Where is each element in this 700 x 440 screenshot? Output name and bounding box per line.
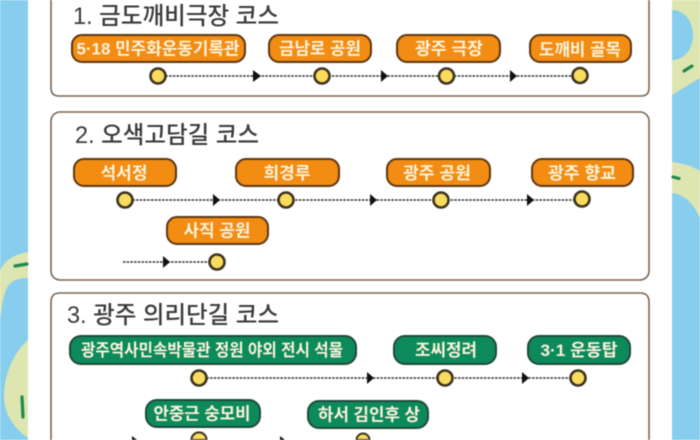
stop: 석서정: 석서정 [100, 164, 148, 183]
heading: course 1: 1. 금도깨비극장 코스 [73, 3, 279, 30]
stop: 사직 공원: 사직 공원 [184, 222, 250, 240]
stop: 금남로 공원: 금남로 공원 [279, 40, 361, 58]
stop: 박물관 정원 석물 [70, 336, 356, 364]
background: right water and islands [672, 0, 700, 440]
stop: 5·18 기록관: 5·18 민주화운동기록관 [76, 40, 240, 58]
stop: 안중근 숭모비 [146, 400, 260, 427]
stop: 금남로 공원 [269, 35, 371, 62]
heading: course 2: 2. 오색고담길 코스 [75, 122, 259, 149]
stop: 석서정 [74, 159, 176, 186]
stop: 안중근 숭모비: 안중근 숭모비 [154, 404, 250, 424]
stop: 도깨비 골목: 도깨비 골목 [539, 40, 621, 60]
stop: 하서 김인후 상 [308, 401, 428, 428]
stop: 조씨정려 [394, 336, 496, 364]
route line 2 [118, 192, 590, 270]
stop: 5·18 기록관 [72, 35, 245, 62]
stop: 3·1 운동탑: 3·1 운동탑 [540, 341, 618, 360]
panel: course 2 [51, 112, 649, 280]
stop: 광주 향교 [532, 159, 633, 186]
stop: 희경루 [236, 159, 339, 186]
stop: 도깨비 골목 [530, 35, 631, 62]
stop: 3·1 운동탑 [528, 336, 630, 364]
background: left water and islands [0, 0, 28, 440]
stop: 광주 극장: 광주 극장 [415, 40, 483, 58]
stop: 광주 공원: 광주 공원 [403, 164, 471, 183]
stop: 사직 공원 [167, 217, 268, 244]
stop: 광주 공원 [387, 159, 490, 186]
heading: course 3: 3. 광주 의리단길 코스 [67, 302, 279, 329]
stop: 광주 향교: 광주 향교 [548, 164, 616, 183]
route line 3 [132, 370, 586, 440]
stop: 광주 극장 [397, 35, 500, 62]
stop: 하서 김인후 상: 하서 김인후 상 [318, 406, 420, 424]
stop: 희경루: 희경루 [264, 164, 310, 183]
route line 1 [150, 68, 588, 84]
panel: course 3 [51, 293, 649, 440]
panel: course 1 [51, 0, 649, 96]
stop: 박물관 정원 석물: 광주역사민속박물관 정원 야외 전시 석물 [81, 341, 343, 360]
stop: 조씨정려: 조씨정려 [415, 341, 477, 360]
